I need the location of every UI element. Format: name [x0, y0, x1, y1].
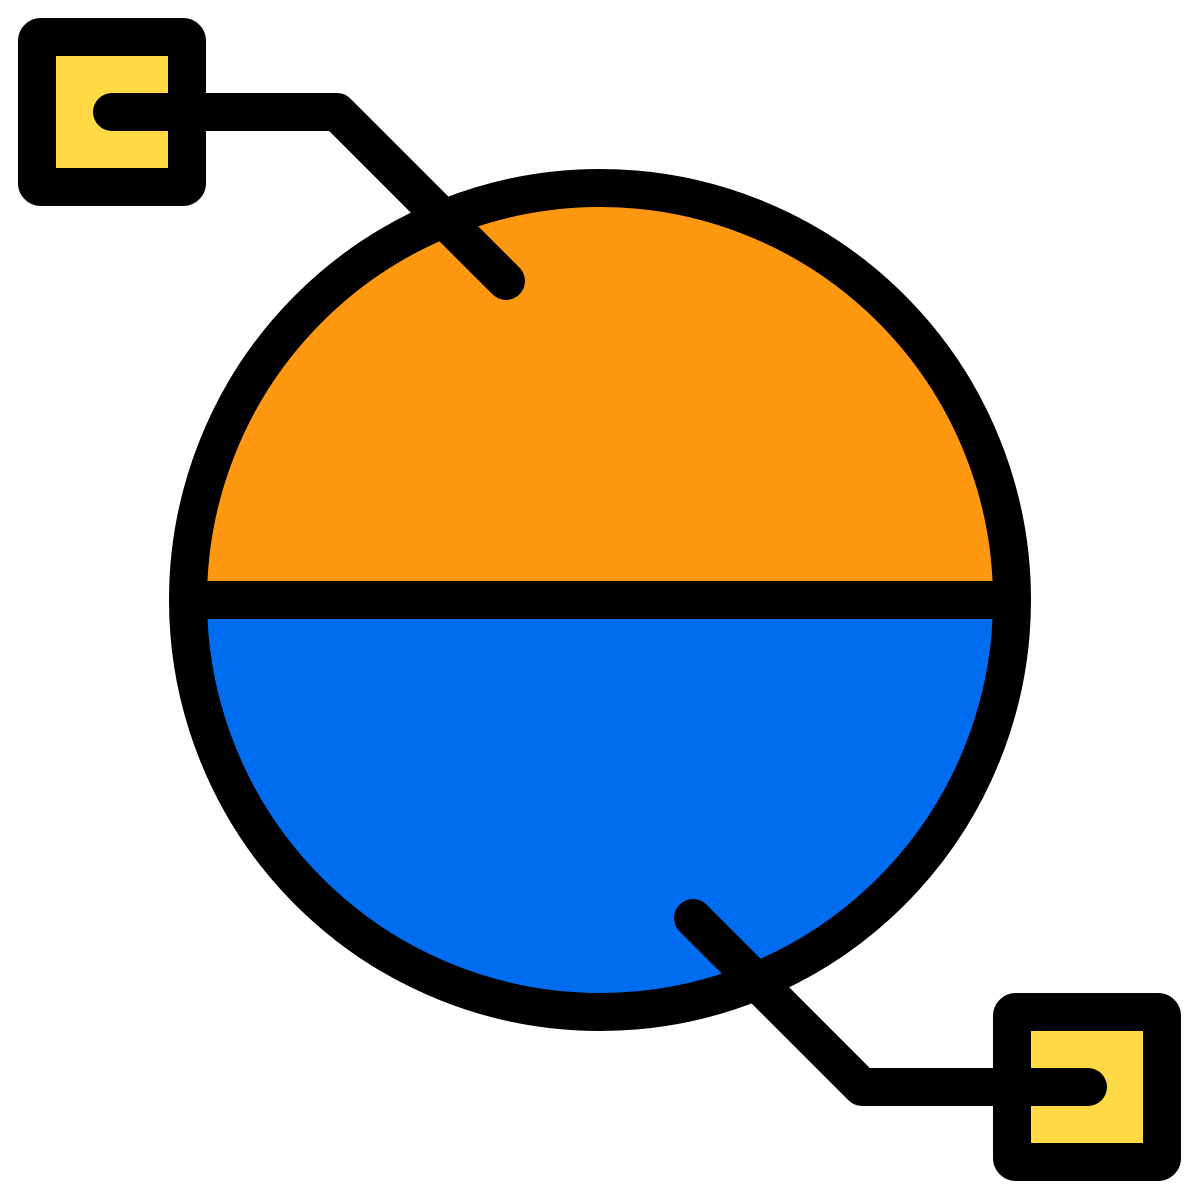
- connector: bottom-right: [693, 918, 1162, 1162]
- circle outline: [188, 188, 1012, 1012]
- divider line: [188, 581, 1012, 619]
- circle: blue bottom half: [188, 600, 1012, 1012]
- connector: top-left: [37, 37, 506, 281]
- circle: orange top half: [188, 188, 1012, 600]
